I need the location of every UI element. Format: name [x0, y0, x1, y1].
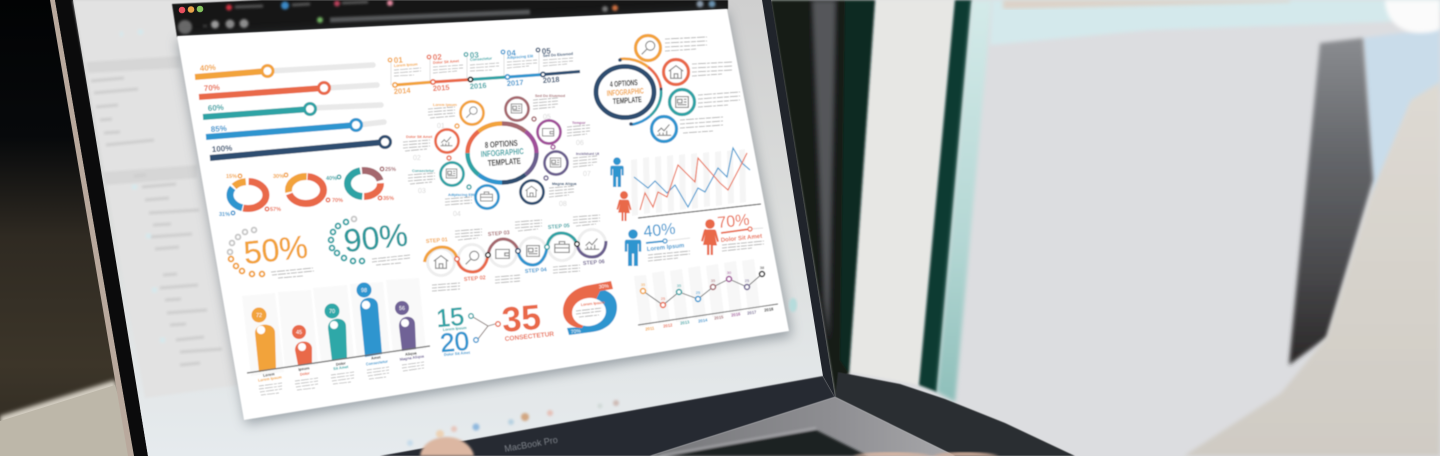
- 15 + 20 = 35 stat: [435, 298, 555, 358]
- timeline captions: Dolor Sit Amet: [433, 59, 460, 65]
- timeline years: 2018: [543, 75, 560, 85]
- toolbar icons and tabs: [178, 0, 716, 34]
- option circles: [636, 36, 694, 142]
- timeline numbers: 05: [542, 46, 552, 56]
- timeline captions: Lorem Ipsum: [394, 62, 418, 68]
- white wall panel: [849, 0, 955, 385]
- column titles: Dolor: [336, 361, 347, 367]
- wheel numbers: 08: [559, 201, 567, 208]
- bar fills: [195, 71, 385, 158]
- timeline numbers: 03: [470, 50, 480, 60]
- timeline text lines: [394, 58, 573, 76]
- year labels: 2011: [645, 325, 655, 332]
- timeline numbers: 02: [433, 52, 443, 62]
- step labels: STEP 02: [464, 275, 486, 283]
- chart nodes: [640, 272, 764, 308]
- donut labels: 40%: [326, 176, 337, 182]
- timeline captions: [394, 52, 574, 68]
- step text blocks: [432, 215, 600, 291]
- column value badges: 98: [361, 288, 367, 294]
- ring title: [607, 78, 644, 106]
- right bezel: [762, 0, 835, 397]
- bar thumbs: [262, 66, 390, 148]
- chart stripes: [631, 149, 746, 216]
- column captions: Lorem Ipsum: [258, 375, 283, 383]
- 8 options wheel: [403, 94, 600, 218]
- donut 2: [288, 176, 324, 204]
- year labels: 2014: [698, 317, 708, 324]
- 35 caption: CONSECTETUR: [504, 331, 555, 343]
- 90% dots: [329, 217, 364, 263]
- column captions: Sit Amet: [333, 365, 349, 371]
- node values: 35: [641, 282, 646, 287]
- orange column: [255, 325, 276, 372]
- year labels: [645, 306, 774, 332]
- wheel numbers: 02: [413, 155, 421, 162]
- wheel title: 8 OPTIONS: [484, 138, 518, 150]
- fingers at the keyboard: [853, 452, 999, 456]
- laptop rear housing: [835, 372, 1075, 456]
- wheel numbers: 07: [583, 171, 591, 178]
- 50% dots: [228, 228, 264, 276]
- timeline years: 2014: [394, 86, 412, 96]
- woman figure: [701, 219, 719, 255]
- node values: 30: [727, 270, 732, 275]
- node values: [641, 265, 765, 301]
- wheel captions: [406, 94, 600, 197]
- 90% text lines: [372, 255, 410, 265]
- donut 1: [230, 182, 266, 208]
- 90% gauge: [329, 216, 410, 265]
- ring end caps: [618, 58, 662, 126]
- dark monitor edge: [1289, 38, 1373, 365]
- donut labels: 35%: [383, 196, 394, 202]
- step labels: STEP 03: [488, 230, 510, 238]
- wheel captions: Sed Do Eiusmod: [535, 94, 566, 98]
- bar percentages: 85%: [211, 124, 227, 134]
- year labels: 2017: [747, 309, 757, 316]
- column captions: Magna Aliqua: [399, 354, 425, 362]
- wheel satellites: [436, 98, 568, 208]
- stat captions: Lorem Ipsum: [443, 326, 467, 332]
- wheel numbers: 05: [543, 114, 551, 121]
- finger on trackpad: [420, 437, 474, 456]
- timeline numbers: 04: [507, 48, 517, 58]
- timeline numbers: 01: [394, 55, 404, 65]
- timeline step markers: [388, 48, 540, 62]
- wheel numbers: 03: [418, 188, 426, 195]
- column titles: Lorem: [263, 372, 275, 378]
- timeline stems: [391, 52, 539, 85]
- column titles: [263, 351, 418, 378]
- 40% stat: 40%: [643, 221, 676, 241]
- outer arcs: [620, 59, 661, 124]
- teal top band: [990, 0, 1440, 45]
- node values: 25: [661, 296, 666, 301]
- timeline years: 2015: [433, 83, 450, 93]
- node values: 25: [745, 278, 750, 283]
- wheel captions: Dolor Sit Amet: [406, 135, 433, 139]
- timeline numbers: [394, 46, 552, 65]
- laptop: [50, 0, 1075, 456]
- red column: [295, 341, 312, 365]
- chart stripes: [634, 259, 760, 327]
- timeline years: [394, 75, 560, 96]
- lower bezel: [380, 376, 835, 456]
- screen surface: [73, 0, 823, 456]
- year labels: 2016: [731, 311, 741, 318]
- timeline captions: Consectetur: [470, 56, 493, 62]
- column value badges: 56: [399, 306, 405, 312]
- wheel satellite icons: [440, 104, 561, 201]
- chart axis: [638, 304, 778, 325]
- two-part ring chart: [563, 281, 617, 335]
- dark green window frame: [919, 0, 972, 392]
- wheel text blocks: [403, 98, 597, 205]
- stat captions: Dolor Sit Amet: [444, 351, 471, 357]
- column chart: [242, 278, 430, 395]
- column captions: Dolor: [300, 371, 311, 377]
- step labels: [426, 223, 605, 283]
- laptop brand text: MacBook Pro: [504, 435, 559, 454]
- column backgrounds: [242, 278, 426, 376]
- column value badges: [252, 282, 409, 339]
- donut labels: 15%: [226, 174, 237, 180]
- donut labels: [219, 167, 396, 218]
- window buttons: [179, 6, 203, 13]
- silver keyboard deck: [650, 397, 955, 456]
- column value badges: 70: [329, 309, 335, 315]
- node values: 38: [760, 265, 765, 270]
- purple column: [399, 317, 416, 351]
- 70% text lines: [722, 241, 764, 251]
- node values: 25: [696, 290, 701, 295]
- number 35: 35: [500, 298, 542, 340]
- step labels: STEP 05: [548, 223, 570, 231]
- chart axis: [638, 204, 761, 218]
- wheel captions: Consectetur: [412, 169, 435, 173]
- 40% and 70% person stats: [625, 212, 764, 266]
- blurred app sidebar: [73, 0, 240, 398]
- donut labels: 31%: [219, 212, 230, 218]
- pale blue panel: [1363, 28, 1440, 200]
- wheel captions: Lorem Ipsum: [433, 103, 457, 107]
- year labels: 2013: [680, 319, 690, 326]
- ring centre: [570, 296, 608, 328]
- ring text lines: [576, 308, 602, 317]
- number 15: 15: [435, 303, 465, 333]
- bar percentages: 40%: [200, 63, 216, 73]
- bar percentages: 60%: [208, 103, 224, 113]
- red part: [563, 281, 613, 328]
- wheel numbers: [413, 114, 591, 218]
- column titles: Amet: [371, 355, 382, 361]
- timeline years: 2016: [470, 81, 487, 91]
- timeline years: 2017: [507, 78, 524, 88]
- column titles: Aliqua: [405, 351, 418, 357]
- blue column: [360, 298, 382, 357]
- wheel captions: Tempor: [572, 121, 586, 125]
- wheel numbers: 06: [576, 140, 584, 147]
- dock icons: [407, 400, 619, 446]
- stat captions: [443, 326, 471, 357]
- year labels: 2018: [764, 306, 774, 313]
- wave nodes: [455, 242, 579, 261]
- 70% slider: [721, 227, 763, 233]
- 70% stat: 70%: [717, 212, 750, 232]
- timeline captions: Sed Do Eiusmod: [543, 52, 574, 58]
- pale teal window strip: [937, 0, 992, 402]
- timeline nodes: [393, 72, 545, 87]
- column value badges: 45: [296, 330, 302, 336]
- column titles: Ipsum: [298, 366, 310, 372]
- 50% gauge: [228, 228, 314, 278]
- bar percentages: 70%: [204, 83, 220, 93]
- main ring: [596, 66, 654, 118]
- donut 3: [348, 170, 380, 196]
- wheel captions: Magna Aliqua: [552, 182, 577, 186]
- number 20: 20: [439, 326, 470, 358]
- teal column: [328, 319, 347, 361]
- donut labels: 70%: [332, 198, 343, 204]
- column axis: [247, 346, 430, 373]
- year line chart: [634, 259, 778, 332]
- wheel ring: [468, 124, 536, 182]
- brown top strip: [1003, 0, 1290, 9]
- bar percentages: 100%: [212, 144, 233, 154]
- wheel title: [480, 138, 524, 168]
- 70% caption: Dolor Sit Amet: [721, 234, 762, 244]
- option text blocks: [665, 37, 740, 133]
- step icons: [434, 238, 599, 268]
- keyboard: [660, 428, 868, 456]
- step labels: STEP 01: [426, 237, 448, 245]
- 50% text lines: [271, 268, 314, 278]
- white sheet: [177, 9, 789, 420]
- blue series: [634, 148, 750, 207]
- donut labels: 30%: [273, 174, 284, 180]
- wheel numbers: 01: [437, 123, 445, 130]
- white highlight top right: [1385, 0, 1440, 33]
- wheel captions: Incididunt Ut: [576, 152, 600, 156]
- ring title: 4 OPTIONS: [610, 78, 638, 89]
- donut labels: 25%: [385, 167, 396, 173]
- 50% number: 50%: [242, 228, 309, 271]
- browser toolbar: [172, 0, 728, 37]
- column captions: Consectetur: [366, 359, 389, 367]
- column knobs: [257, 301, 409, 351]
- laptop lid silver edge: [50, 0, 134, 456]
- year labels: 2012: [663, 322, 673, 329]
- 70% label: 70%: [571, 328, 582, 335]
- wheel numbers: 04: [453, 211, 461, 218]
- node values: 35: [677, 283, 682, 288]
- donut charts: [219, 167, 396, 218]
- blue part: [567, 288, 617, 335]
- donut labels: 57%: [270, 207, 281, 213]
- column text lines: [259, 362, 424, 395]
- year labels: 2015: [714, 314, 724, 321]
- option icons: [642, 41, 688, 135]
- dark strip behind screen: [770, 0, 875, 397]
- 90% number: 90%: [342, 216, 409, 259]
- step circles: [428, 230, 606, 276]
- donut label markers: [231, 167, 384, 215]
- bar percentages: [200, 63, 233, 154]
- left dark background: [0, 0, 140, 456]
- wave segments: [424, 233, 606, 272]
- timeline segments: [395, 72, 580, 85]
- sheet shadow: [177, 12, 792, 424]
- man figure: [625, 229, 641, 266]
- timeline captions: Adipiscing Elit: [507, 54, 534, 60]
- chart polyline: [643, 274, 762, 305]
- wheel connectors: [447, 117, 555, 189]
- column captions: [258, 354, 425, 383]
- column value badges: 72: [256, 313, 262, 319]
- 40% slider: [646, 238, 690, 243]
- step labels: STEP 06: [583, 259, 605, 267]
- step labels: STEP 04: [525, 267, 548, 275]
- infographic sheet: [177, 9, 789, 420]
- person icon orange: [616, 191, 632, 221]
- person icon blue: [610, 157, 624, 187]
- wheel captions: Adipiscing Elit: [448, 193, 475, 197]
- bar tracks: [270, 65, 384, 125]
- 5-point timeline: [388, 46, 580, 96]
- wheel title: INFOGRAPHIC: [480, 146, 524, 159]
- ring title: TEMPLATE: [613, 95, 643, 106]
- node values: 35: [711, 278, 716, 283]
- six-step wave: [424, 215, 606, 291]
- 30% label: 30%: [599, 283, 610, 290]
- 40% text lines: [648, 251, 690, 261]
- ring caption: Lorem Ipsum: [581, 300, 605, 307]
- beige foreground shoulder: [1184, 82, 1440, 456]
- connector: [469, 314, 500, 342]
- left black bezel: [55, 0, 148, 456]
- orange series: [640, 153, 747, 210]
- ring title: INFOGRAPHIC: [607, 86, 644, 98]
- teal reflection right of sheet: [789, 298, 797, 312]
- 40% caption: Lorem Ipsum: [647, 243, 685, 253]
- wheel title: TEMPLATE: [487, 156, 521, 168]
- progress bars panel: [195, 63, 390, 158]
- 4 options panel: [596, 36, 740, 142]
- gender line chart: [610, 148, 761, 221]
